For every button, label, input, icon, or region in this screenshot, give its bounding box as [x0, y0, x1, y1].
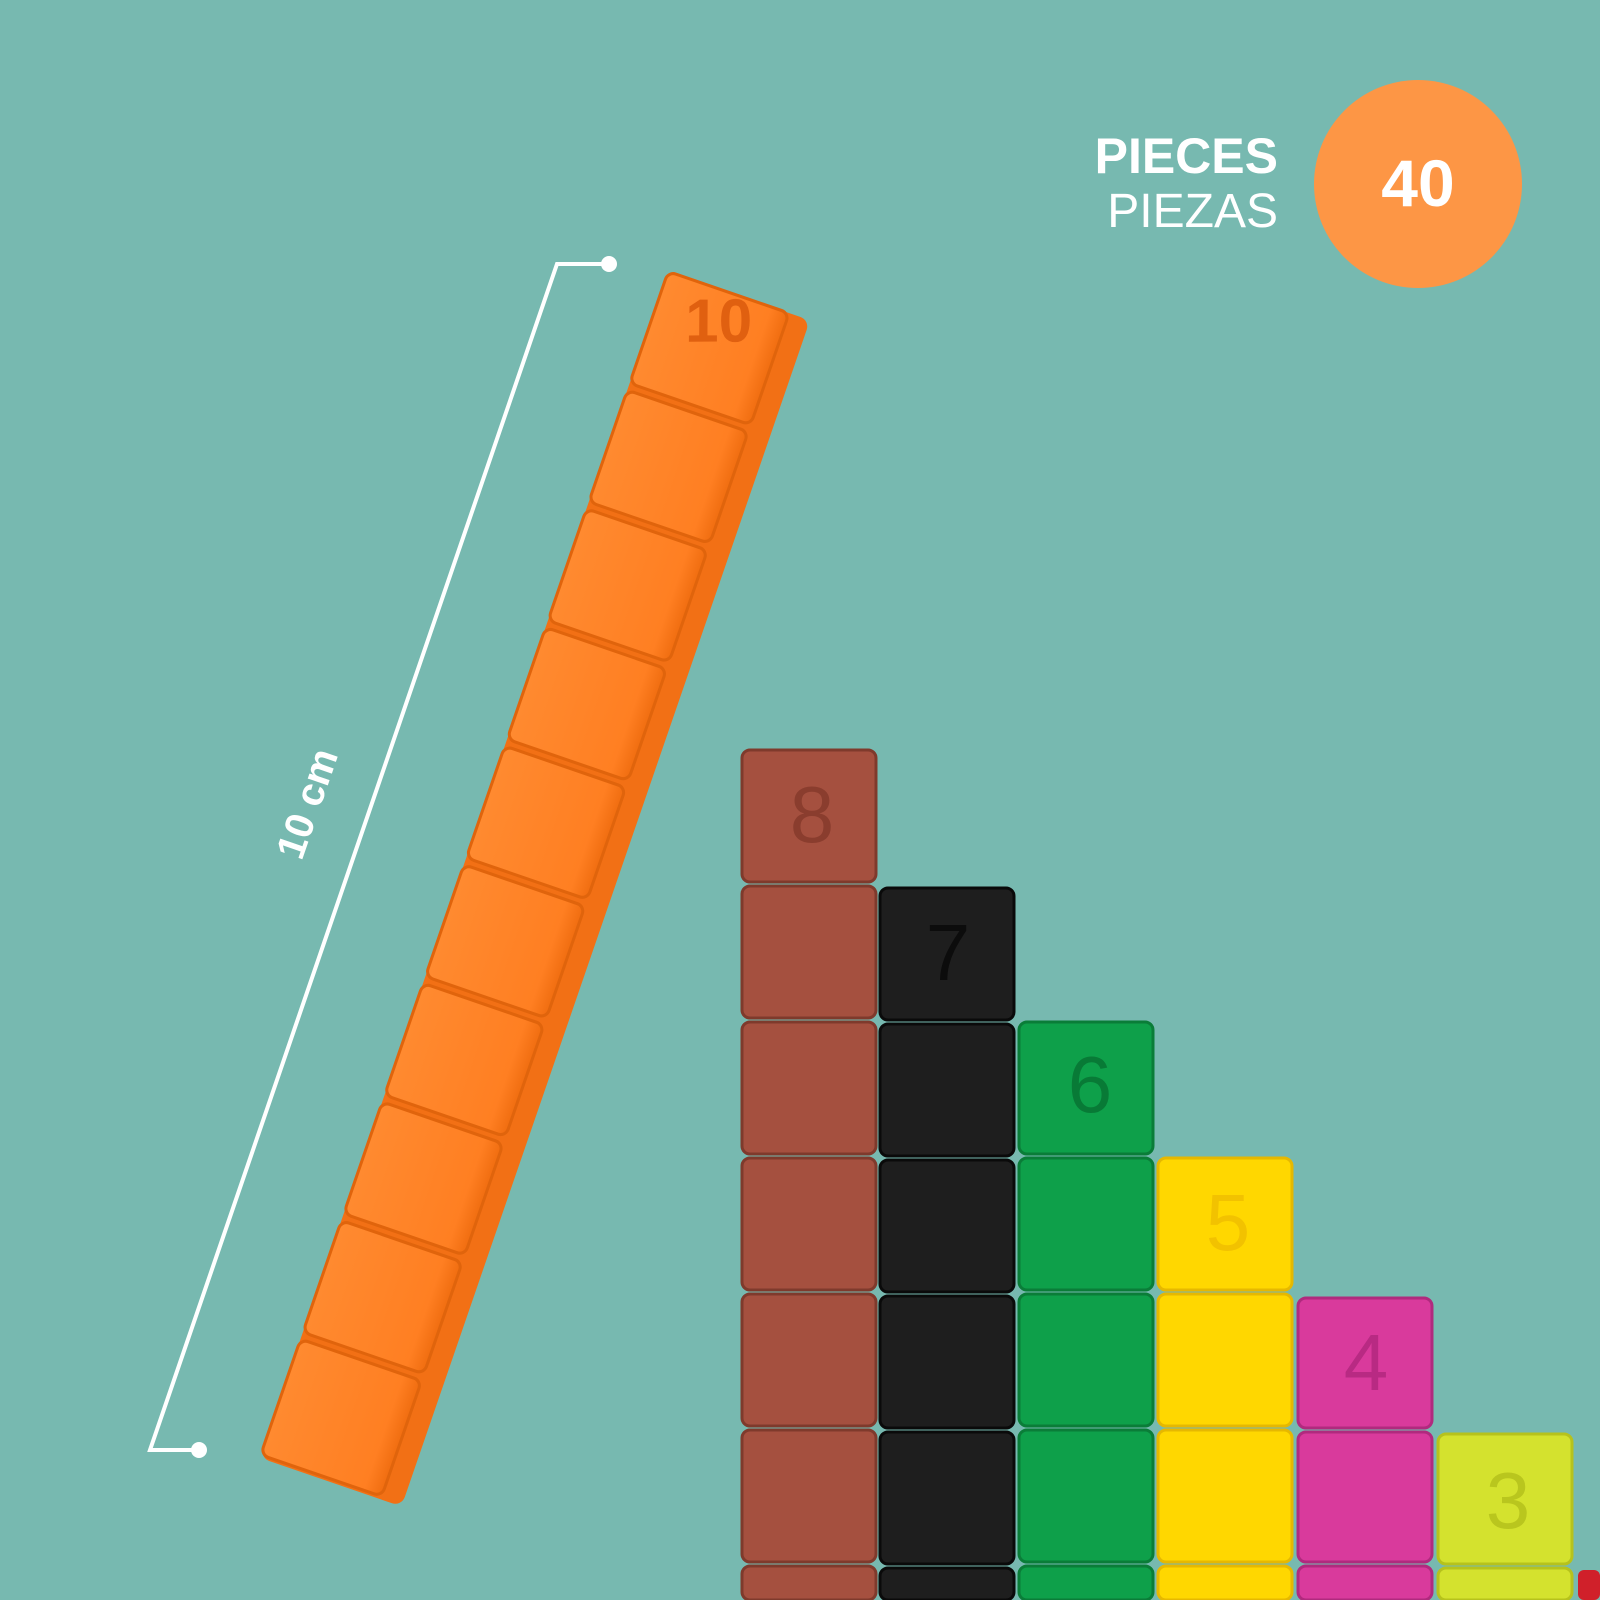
- column 6 green: 6: [1068, 1040, 1112, 1129]
- column 5 yellow: [1158, 1158, 1292, 1600]
- column 3 lime: [1438, 1434, 1572, 1600]
- orange ten rod: [260, 258, 814, 1507]
- column 8 brown: 8: [790, 770, 834, 859]
- column 8 brown: [742, 750, 876, 1600]
- column 4 magenta: 4: [1344, 1318, 1388, 1407]
- pieces label: PIEZAS: [1107, 185, 1278, 238]
- badge: 40 pieces: 40: [1381, 146, 1455, 220]
- pieces label: [1095, 128, 1278, 238]
- orange ten rod: 10: [685, 286, 752, 355]
- column 7 black: 7: [926, 908, 970, 997]
- column 4 magenta: [1298, 1298, 1432, 1600]
- column 3 lime: 3: [1486, 1456, 1530, 1545]
- column 2 red sliver: [1578, 1570, 1600, 1600]
- badge: 40 pieces: [1314, 80, 1522, 288]
- pieces label: PIECES: [1095, 128, 1278, 184]
- column 5 yellow: 5: [1206, 1178, 1250, 1267]
- column 7 black: [880, 888, 1014, 1600]
- dimension line: 10 cm: [150, 256, 617, 1458]
- column 6 green: [1019, 1022, 1153, 1600]
- dimension line: 10 cm: 10 cm: [268, 743, 347, 865]
